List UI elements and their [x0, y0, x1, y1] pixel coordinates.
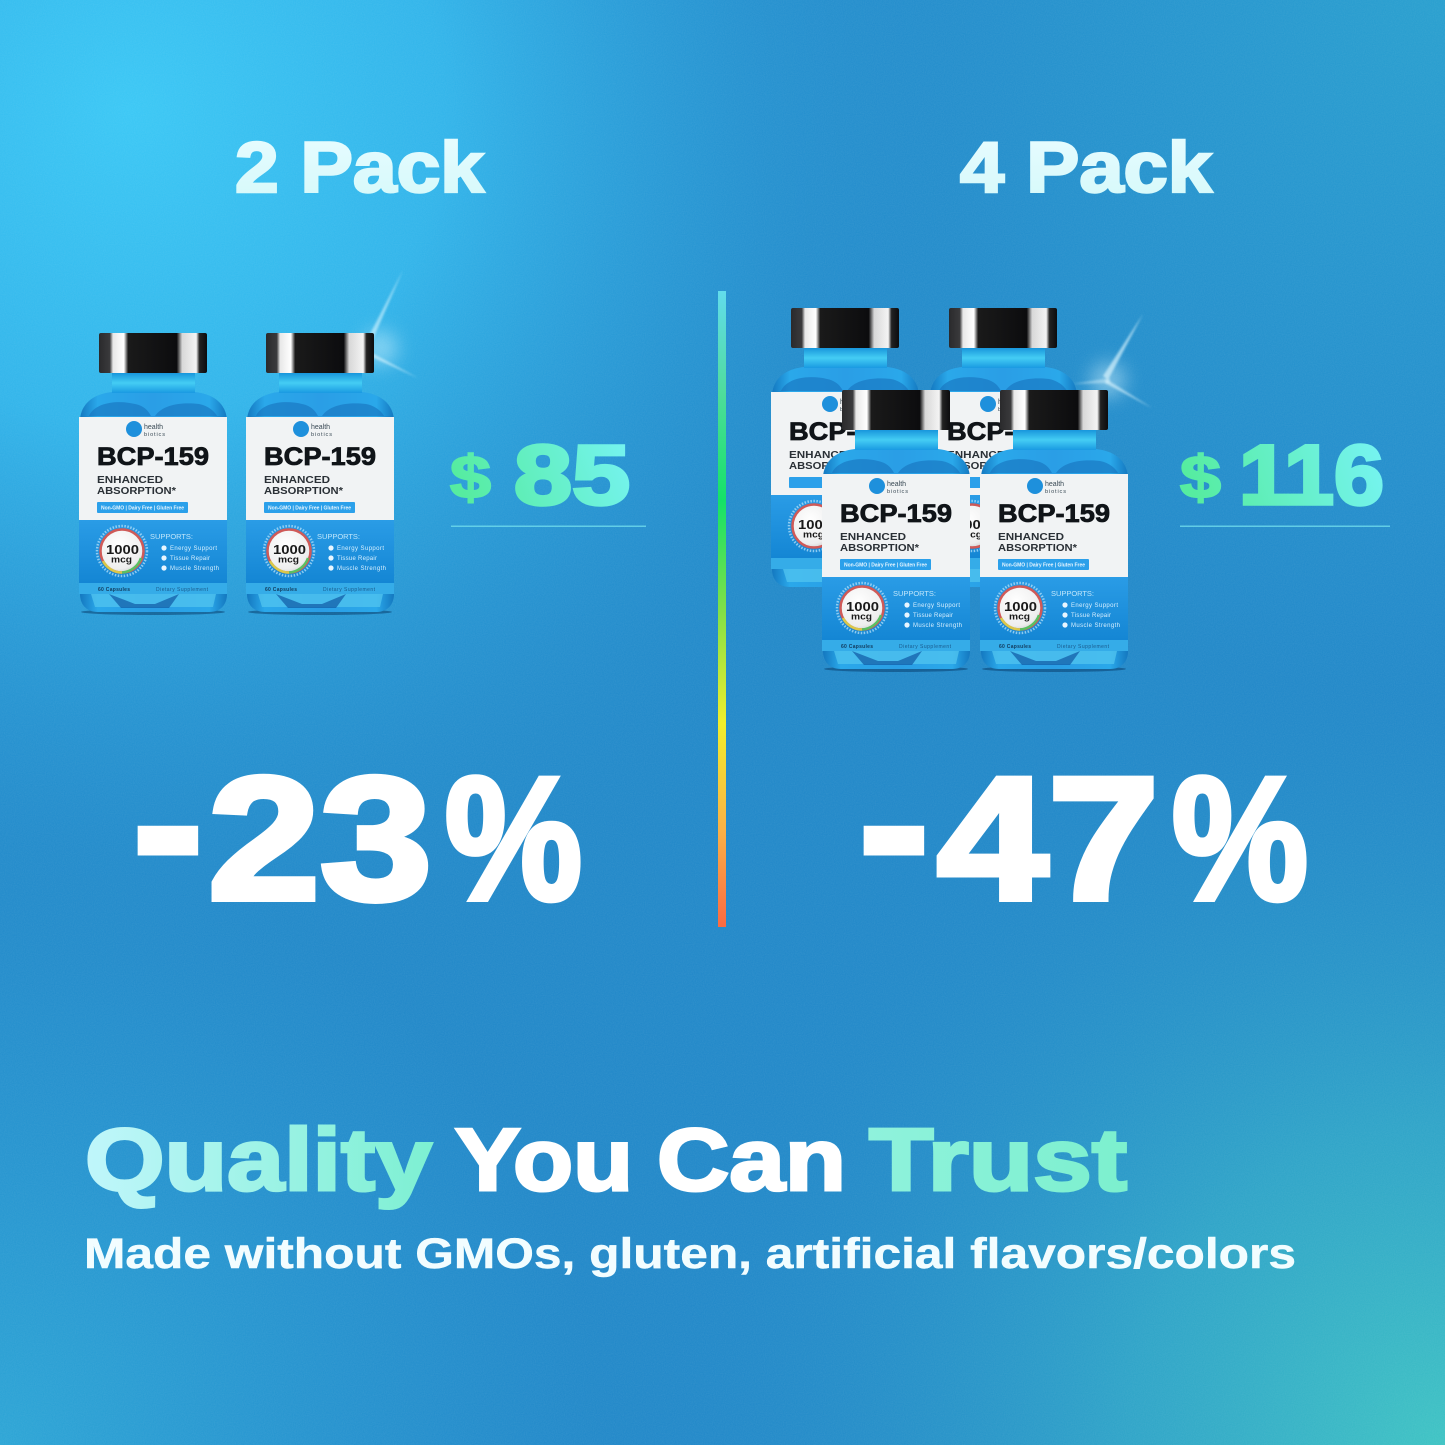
blue label panel: SUPPORTS: — [317, 532, 360, 541]
blue label panel: mcg — [851, 612, 872, 622]
blue label panel: 1000 — [1004, 599, 1037, 614]
headline: Quality You Can Trust: You — [455, 1110, 633, 1209]
blue label panel: Dietary Supplement — [156, 587, 209, 593]
headline: Quality You Can Trust: Trust — [869, 1110, 1127, 1209]
bottle: 4 pack back left — [771, 308, 919, 587]
bottle: 2 pack left — [79, 333, 227, 615]
blue label panel: Energy Support — [913, 603, 960, 609]
white label: biotics — [311, 432, 332, 438]
white label: health — [887, 481, 906, 488]
white label: BCP-159 — [947, 418, 1059, 446]
white label — [822, 474, 970, 577]
white label — [980, 474, 1128, 577]
blue label panel: Muscle Strength — [337, 566, 386, 572]
bottle cap — [1000, 390, 1108, 430]
blue label panel: mcg — [961, 530, 982, 540]
price: 4 pack: $ — [1180, 444, 1221, 511]
bottle cap — [266, 333, 374, 373]
white label: ENHANCED — [947, 450, 1013, 461]
heading: 2 Pack: 2 Pack — [235, 129, 485, 208]
price: 4 pack — [1180, 428, 1390, 527]
blue label panel: 1000 — [798, 517, 831, 532]
blue label panel: mcg — [278, 554, 299, 564]
white label: BCP-159 — [789, 418, 901, 446]
blue label panel — [929, 495, 1077, 569]
white label: Non-GMO | Dairy Free | Gluten Free — [844, 562, 927, 568]
white label: health — [998, 399, 1017, 406]
vertical gradient divider — [718, 291, 726, 927]
blue label panel: 60 Capsules — [999, 644, 1031, 650]
blue label panel: Dietary Supplement — [323, 587, 376, 593]
bottle: 2 pack right — [246, 333, 394, 615]
white label: biotics — [840, 407, 861, 413]
blue label panel: 60 Capsules — [841, 644, 873, 650]
heading: 4 Pack: 4 Pack — [960, 129, 1213, 208]
discount: -47%: % — [1172, 742, 1308, 937]
blue label panel: Dietary Supplement — [1057, 644, 1110, 650]
blue label panel — [822, 577, 970, 651]
price: 2 pack — [450, 428, 646, 527]
blue label panel: Energy Support — [1071, 603, 1118, 609]
blue label panel: Tissue Repair — [913, 613, 953, 619]
blue label panel: Dietary Supplement — [899, 644, 952, 650]
bottle cap — [99, 333, 207, 373]
white label: health — [1045, 481, 1064, 488]
white label: ABSORPTION* — [789, 461, 868, 472]
white label: health — [311, 424, 330, 431]
icon: light flare, 2 pack — [362, 270, 418, 378]
blue label panel: SUPPORTS: — [893, 589, 936, 598]
white label: Non-GMO | Dairy Free | Gluten Free — [268, 506, 351, 512]
white label: Non-GMO | Dairy Free | Gluten Free — [101, 506, 184, 512]
white label — [79, 417, 227, 520]
bottle cap — [949, 308, 1057, 348]
white label: Non-GMO | Dairy Free | Gluten Free — [1002, 562, 1085, 568]
white label: ABSORPTION* — [947, 461, 1026, 472]
discount: -47%: 47 — [937, 742, 1159, 937]
white label: biotics — [887, 489, 908, 495]
bottle: 4 pack back right — [929, 308, 1077, 587]
discount: -23%: 23 — [208, 742, 432, 937]
white label: ENHANCED — [264, 475, 330, 486]
blue label panel: Energy Support — [337, 546, 384, 552]
white label: health — [840, 399, 859, 406]
white label: BCP-159 — [840, 500, 952, 528]
white label — [929, 392, 1077, 495]
headline: Quality You Can Trust: Quality — [85, 1110, 432, 1209]
white label: BCP-159 — [264, 443, 376, 471]
headline: Quality You Can Trust: Can — [657, 1110, 846, 1209]
bottle cap — [842, 390, 950, 430]
white label: ABSORPTION* — [840, 543, 919, 554]
blue label panel: mcg — [1009, 612, 1030, 622]
white label: BCP-159 — [97, 443, 209, 471]
blue label panel: 1000 — [846, 599, 879, 614]
white label: ENHANCED — [840, 532, 906, 543]
white label — [246, 417, 394, 520]
price: 2 pack: $ — [450, 444, 491, 511]
blue label panel — [79, 520, 227, 594]
white label: ABSORPTION* — [97, 486, 176, 497]
blue label panel: SUPPORTS: — [150, 532, 193, 541]
blue label panel: Energy Support — [170, 546, 217, 552]
white label: ABSORPTION* — [998, 543, 1077, 554]
blue label panel: Muscle Strength — [913, 623, 962, 629]
white label: ENHANCED — [789, 450, 855, 461]
price: 2 pack: 85 — [514, 428, 630, 522]
icon: light flare, 4 pack — [1072, 314, 1152, 408]
white label: health — [144, 424, 163, 431]
white label: ABSORPTION* — [264, 486, 343, 497]
white label: ENHANCED — [97, 475, 163, 486]
blue label panel: 1000 — [273, 542, 306, 557]
blue label panel — [771, 495, 919, 569]
bottle: 4 pack front left — [822, 390, 970, 672]
bottle: 4 pack front right — [980, 390, 1128, 672]
blue label panel: mcg — [111, 554, 132, 564]
discount: -23%: % — [445, 742, 582, 937]
discount: -47%: - — [861, 729, 927, 924]
blue label panel: 1000 — [956, 517, 989, 532]
blue label panel: Tissue Repair — [170, 556, 210, 562]
price: 4 pack: 116 — [1239, 428, 1384, 522]
blue label panel: Muscle Strength — [1071, 623, 1120, 629]
blue label panel: 60 Capsules — [265, 587, 297, 593]
white label: BCP-159 — [998, 500, 1110, 528]
white label: ENHANCED — [998, 532, 1064, 543]
blue label panel: mcg — [803, 530, 824, 540]
white label: biotics — [1045, 489, 1066, 495]
bottle cap — [791, 308, 899, 348]
discount: -23%: - — [135, 729, 201, 924]
blue label panel — [980, 577, 1128, 651]
blue label panel: Muscle Strength — [170, 566, 219, 572]
white label: biotics — [998, 407, 1019, 413]
blue label panel: 1000 — [106, 542, 139, 557]
blue label panel: SUPPORTS: — [1051, 589, 1094, 598]
subheadline: Made without GMOs, gluten, artificial flavors/colors — [84, 1230, 1296, 1278]
blue label panel: Tissue Repair — [1071, 613, 1111, 619]
blue label panel — [246, 520, 394, 594]
white label: biotics — [144, 432, 165, 438]
blue label panel: Tissue Repair — [337, 556, 377, 562]
blue label panel: 60 Capsules — [98, 587, 130, 593]
white label — [771, 392, 919, 495]
